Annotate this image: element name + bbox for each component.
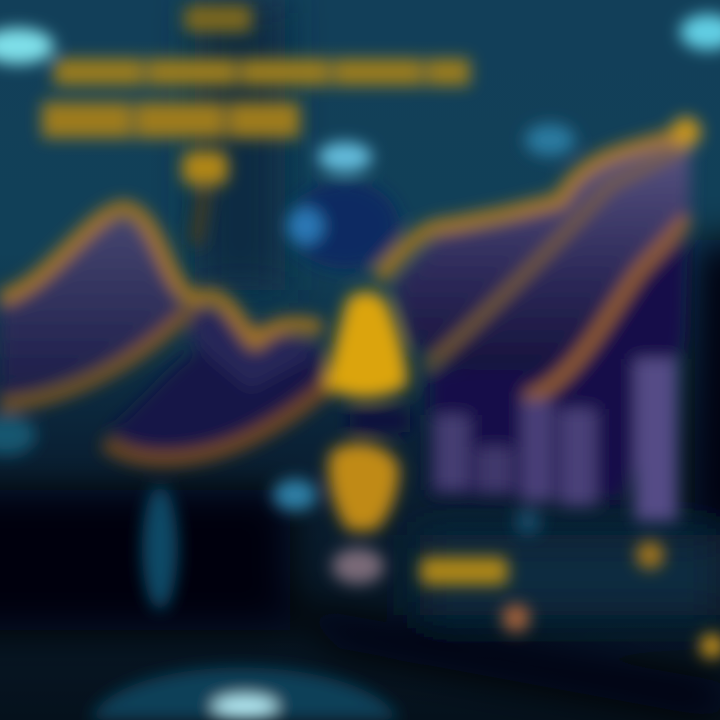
purple bar chart: [435, 359, 677, 521]
icon: upper gold shape: [324, 292, 408, 398]
title: first line: [54, 58, 470, 86]
icon: base of figure: [332, 548, 384, 584]
peak marker: [671, 117, 701, 147]
right inner gold line: [425, 148, 685, 368]
title: third label: [182, 151, 228, 185]
central gold figure: [324, 292, 410, 584]
connector below title: [195, 190, 205, 245]
marker: blue dot: [515, 509, 541, 535]
lower left purple area: [110, 335, 330, 458]
title block: [42, 5, 470, 185]
left valley orange line: [105, 378, 335, 459]
soft blue shapes: [0, 181, 400, 720]
left mountain gold line: [0, 208, 322, 342]
right orange line: [525, 218, 688, 398]
title: top label: [184, 5, 252, 32]
right gold line: [378, 132, 685, 278]
left mountain area chart: [0, 208, 335, 459]
dark gap: [350, 410, 410, 432]
marker: orange dot: [502, 604, 530, 632]
marker: gold dot: [636, 541, 664, 569]
marker: edge gold dot: [700, 634, 720, 658]
right area chart: [378, 117, 701, 500]
left lower gold line: [0, 310, 190, 405]
label: gold caption: [420, 557, 508, 585]
title: second line: [42, 102, 300, 138]
icon: lower gold shape: [328, 443, 399, 531]
small labels and markers: [420, 509, 720, 658]
